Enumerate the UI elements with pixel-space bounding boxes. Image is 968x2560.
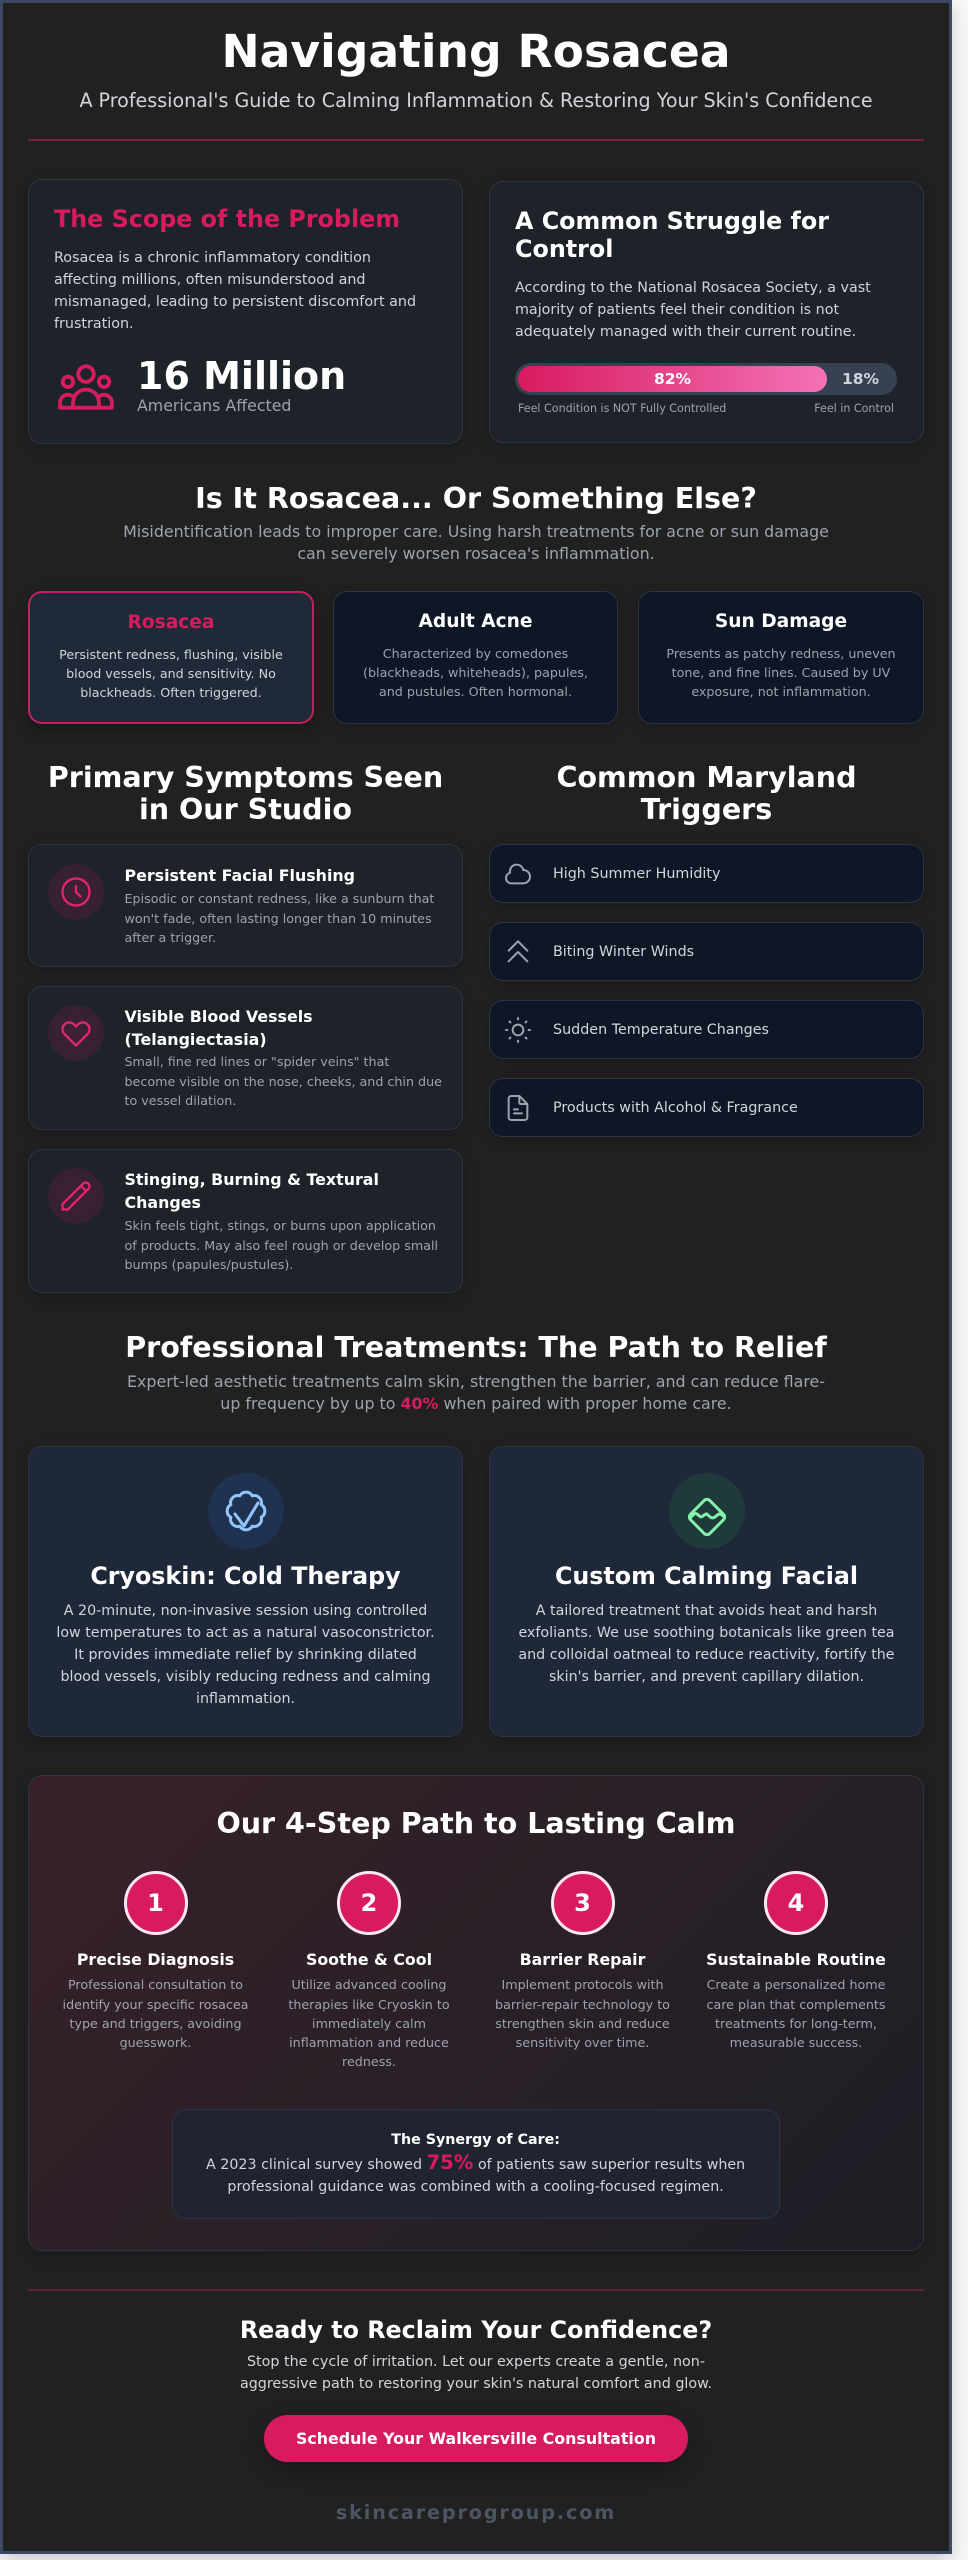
symptom title	[124, 1007, 313, 1049]
card: sun damage	[638, 591, 924, 724]
text: misidentification	[123, 522, 829, 563]
step text: strengthen skin and reduce	[495, 2016, 670, 2031]
panel: a common struggle for control	[489, 181, 924, 443]
text: struggle description: adequately managed with their current routine.	[515, 324, 856, 340]
card: rosacea	[28, 591, 314, 724]
trigger label: Products with Alcohol & Fragrance	[553, 1100, 798, 1116]
step text: barrier-repair technology to	[495, 1997, 670, 2012]
icon: heart	[48, 1005, 104, 1061]
card text: Presents as patchy redness, uneven	[666, 646, 896, 661]
symptom title: (Telangiectasia)	[124, 1030, 267, 1049]
step title: Sustainable Routine	[706, 1950, 886, 1968]
symptom text: after a trigger.	[124, 930, 216, 945]
trigger: temperature	[489, 1000, 924, 1059]
callout: synergy of care	[172, 2109, 780, 2219]
step text: immediately calm	[312, 2016, 426, 2031]
symptom text	[124, 1218, 438, 1272]
bar label: in control: Feel in Control	[814, 402, 894, 415]
step text: sensitivity over time.	[516, 2035, 649, 2050]
step number: 2	[361, 1889, 377, 1917]
trigger: products	[489, 1078, 924, 1137]
card: adult acne	[333, 591, 618, 724]
treatment text: and colloidal oatmeal to reduce reactivity, fortify the	[518, 1647, 895, 1663]
heading: scope: The Scope of the Problem	[54, 205, 400, 233]
heading: maryland triggers	[556, 760, 857, 826]
step text	[288, 1977, 450, 2069]
symptom title: Visible Blood Vessels	[124, 1007, 313, 1026]
step text: Create a personalized home	[707, 1977, 885, 1992]
treatment text: It provides immediate relief by shrinking dilated	[74, 1647, 417, 1663]
text: scope description: affecting millions, often misunderstood and	[54, 272, 366, 288]
card text	[363, 646, 588, 699]
text: treatments intro	[127, 1372, 825, 1413]
text: scope description: frustration.	[54, 316, 134, 332]
treatment text	[56, 1603, 435, 1707]
step text: redness.	[342, 2054, 396, 2069]
trigger label: Sudden Temperature Changes	[553, 1022, 769, 1038]
symptom text: become visible on the nose, cheeks, and chin due	[124, 1074, 442, 1089]
icon: document	[508, 1095, 528, 1121]
icon: clock	[48, 864, 104, 920]
trigger label: High Summer Humidity	[553, 866, 720, 882]
step number	[550, 1871, 614, 1935]
button: schedule consultation	[264, 2415, 688, 2462]
text: treatments intro: Expert-led aesthetic treatments calm skin, strengthen the barrier, and can reduce flare-	[127, 1372, 825, 1391]
bar segment: 82%: 82%	[654, 370, 691, 388]
card text: blood vessels, and sensitivity. No	[66, 666, 276, 681]
subtitle: A Professional's Guide to Calming Inflammation & Restoring Your Skin's Confidence	[79, 90, 873, 112]
symptom text: of products. May also feel rough or develop small	[124, 1238, 438, 1253]
text: struggle description: According to the National Rosacea Society, a vast	[515, 280, 871, 296]
panel: cryoskin	[28, 1446, 463, 1737]
card text: blackheads. Often triggered.	[80, 685, 262, 700]
panel: symptom stinging	[28, 1149, 463, 1293]
step number: 3	[574, 1889, 591, 1917]
callout text: A 2023 clinical survey showed 75% of patients saw superior results when	[206, 2151, 745, 2174]
footer: website: skincareprogroup.com	[336, 2501, 616, 2524]
symptom text: Small, fine red lines or "spider veins" that	[124, 1054, 389, 1069]
symptom text: bumps (papules/pustules).	[124, 1257, 293, 1272]
panel: symptom blood vessels	[28, 986, 463, 1130]
card text: Persistent redness, flushing, visible	[59, 647, 283, 662]
step title: Precise Diagnosis	[77, 1950, 234, 1968]
step number: 1	[147, 1889, 164, 1917]
symptom text	[124, 1054, 442, 1108]
card text: Characterized by comedones	[383, 646, 568, 661]
step title: Barrier Repair	[520, 1950, 645, 1968]
title: Navigating Rosacea	[221, 25, 731, 78]
card title: Rosacea	[128, 612, 214, 633]
icon: people group	[58, 364, 114, 410]
bar chart: 82 vs 18 percent	[515, 363, 897, 395]
text: struggle description	[515, 280, 871, 340]
button: schedule consultation: Schedule Your Walkersville Consultation	[296, 2429, 656, 2448]
symptom title: Changes	[124, 1193, 201, 1212]
step text: care plan that complements	[706, 1997, 886, 2012]
text: call to action	[240, 2354, 712, 2392]
icon: double chevron	[508, 940, 528, 962]
step 2	[288, 1871, 450, 2069]
card text: (blackheads, whiteheads), papules,	[363, 665, 588, 680]
treatment text: exfoliants. We use soothing botanicals like green tea	[518, 1625, 895, 1641]
text: scope description: mismanaged, leading to persistent discomfort and	[54, 294, 416, 310]
heading: maryland triggers: Common Maryland	[556, 760, 857, 794]
callout title: The Synergy of Care:	[391, 2132, 560, 2148]
treatment text: low temperatures to act as a natural vasoconstrictor.	[56, 1625, 435, 1641]
step number	[124, 1871, 188, 1935]
card text: and pustules. Often hormonal.	[379, 684, 572, 699]
step 1	[63, 1871, 248, 2050]
card text: tone, and fine lines. Caused by UV	[672, 665, 890, 680]
heading: primary symptoms: Primary Symptoms Seen	[48, 760, 443, 794]
heading: maryland triggers: Triggers	[641, 792, 772, 826]
trigger label: Biting Winter Winds	[553, 944, 694, 960]
symptom text: Skin feels tight, stings, or burns upon application	[124, 1218, 436, 1233]
text: treatments intro: up frequency by up to 40% when paired with proper home care.	[220, 1394, 732, 1413]
bar label: not controlled: Feel Condition is NOT Fully Controlled	[518, 402, 726, 415]
treatment title: Custom Calming Facial	[555, 1562, 858, 1590]
step text	[495, 1977, 670, 2050]
step title: Soothe & Cool	[306, 1950, 432, 1968]
text: struggle description: majority of patients feel their condition is not	[515, 302, 839, 318]
text: scope description	[54, 250, 416, 332]
step text: Utilize advanced cooling	[291, 1977, 446, 1992]
step text	[706, 1977, 886, 2050]
treatment text: A 20-minute, non-invasive session using controlled	[64, 1603, 427, 1619]
step 4	[706, 1871, 886, 2050]
step text: treatments for long-term,	[715, 2016, 877, 2031]
treatment title: Cryoskin: Cold Therapy	[90, 1562, 401, 1590]
text: call to action: Stop the cycle of irritation. Let our experts create a gentle, non-	[247, 2354, 705, 2370]
step text: inflammation and reduce	[289, 2035, 449, 2050]
heading: struggle: Control	[515, 235, 613, 263]
icon: sun	[505, 1017, 531, 1043]
text: misidentification: can severely worsen rosacea's inflammation.	[297, 544, 655, 563]
stat label: Americans Affected	[137, 396, 291, 415]
trigger: humidity	[489, 844, 924, 903]
callout text: professional guidance was combined with a cooling-focused regimen.	[227, 2179, 724, 2195]
step text: Professional consultation to	[68, 1977, 243, 1992]
card text: exposure, not inflammation.	[691, 684, 871, 699]
symptom title: Persistent Facial Flushing	[124, 866, 355, 884]
heading: primary symptoms: in Our Studio	[139, 792, 352, 826]
step 3	[495, 1871, 670, 2050]
symptom text: won't fade, often lasting longer than 10 minutes	[124, 911, 432, 926]
step text: type and triggers, avoiding	[69, 2016, 242, 2031]
step text: guesswork.	[120, 2035, 191, 2050]
card text	[666, 646, 896, 699]
panel: the scope of the problem	[28, 179, 463, 444]
symptom title	[124, 1170, 379, 1212]
symptom title: Stinging, Burning & Textural	[124, 1170, 379, 1189]
panel: symptom flushing	[28, 844, 463, 967]
step number	[764, 1871, 828, 1935]
symptom text: to vessel dilation.	[124, 1093, 236, 1108]
treatment text: A tailored treatment that avoids heat and harsh	[536, 1603, 877, 1619]
symptom text	[124, 891, 434, 945]
panel: 4-step path	[28, 1775, 924, 2251]
step number	[337, 1871, 401, 1935]
bar segment: 82%	[518, 366, 827, 392]
card title: Sun Damage	[715, 611, 847, 632]
card text	[59, 647, 283, 700]
treatment text	[518, 1603, 895, 1685]
step number: 4	[788, 1889, 804, 1917]
bar segment: 18%: 18%	[842, 370, 879, 388]
trigger: winds	[489, 922, 924, 981]
heading: struggle: A Common Struggle for	[515, 207, 829, 235]
step text: identify your specific rosacea	[63, 1997, 248, 2012]
stat: 16 million: 16 Million	[137, 354, 346, 398]
icon: cloud	[505, 864, 531, 884]
callout text	[206, 2151, 745, 2195]
heading: 4-step path: Our 4-Step Path to Lasting Calm	[216, 1806, 736, 1840]
treatment text: inflammation.	[196, 1691, 295, 1707]
icon: calming diamond	[669, 1473, 745, 1549]
heading: primary symptoms	[48, 760, 443, 826]
icon: cold badge	[208, 1473, 284, 1549]
icon: pencil	[48, 1168, 104, 1224]
text: scope description: Rosacea is a chronic inflammatory condition	[54, 250, 371, 266]
step text: measurable success.	[730, 2035, 862, 2050]
heading: call to action: Ready to Reclaim Your Confidence?	[240, 2316, 712, 2344]
symptom text: Episodic or constant redness, like a sunburn that	[124, 891, 434, 906]
step text: Implement protocols with	[501, 1977, 664, 1992]
heading: is it rosacea: Is It Rosacea... Or Something Else?	[195, 481, 757, 515]
panel: custom calming facial	[489, 1446, 924, 1737]
card title: Adult Acne	[419, 611, 532, 632]
heading: professional treatments: Professional Treatments: The Path to Relief	[125, 1330, 827, 1364]
treatment text: skin's barrier, and prevent capillary dilation.	[549, 1669, 864, 1685]
step text	[63, 1977, 248, 2050]
treatment text: blood vessels, visibly reducing redness and calming	[60, 1669, 431, 1685]
text: misidentification: Misidentification leads to improper care. Using harsh treatments for acne or sun damage	[123, 522, 829, 540]
step text: therapies like Cryoskin to	[288, 1997, 450, 2012]
text: call to action: aggressive path to restoring your skin's natural comfort and glow.	[240, 2376, 712, 2392]
heading: struggle	[515, 207, 829, 263]
